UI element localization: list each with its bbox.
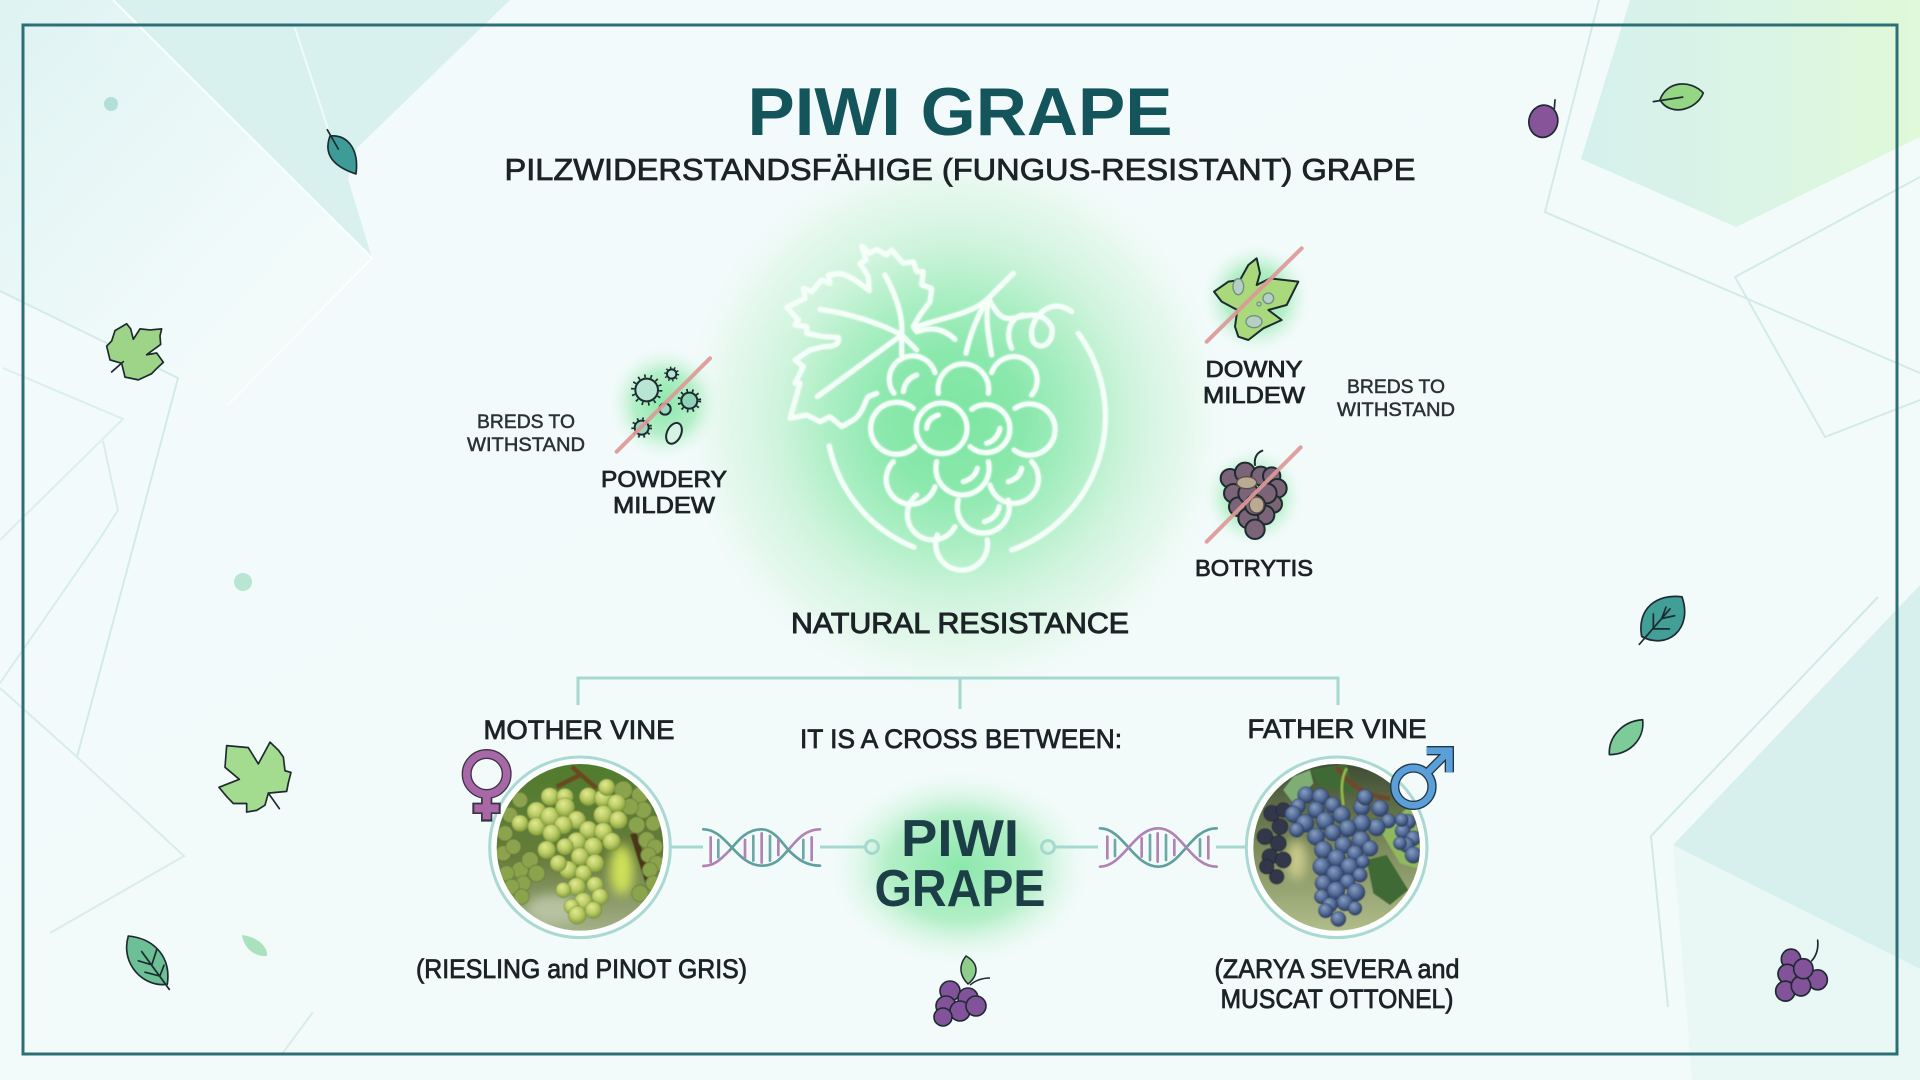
label: breds to withstand right: WITHSTAND xyxy=(1337,399,1455,421)
label: breds to withstand left: WITHSTAND xyxy=(467,434,585,456)
label: downy mildew: MILDEW xyxy=(1203,382,1305,408)
icon: female symbol xyxy=(467,754,507,822)
icon: plum top right xyxy=(1525,100,1562,141)
icon: powdery mildew xyxy=(608,347,722,460)
label: zarya severa and muscat ottonel: (ZARYA SEVERA and xyxy=(1214,954,1460,984)
icon: teal leaf right xyxy=(1639,596,1685,644)
connector bracket xyxy=(578,678,1338,709)
photo: red grape cluster xyxy=(1246,757,1427,938)
connector: right xyxy=(1042,840,1247,854)
icon: green leaf right xyxy=(1609,720,1643,755)
label: father vine: FATHER VINE xyxy=(1248,714,1426,744)
label: botrytis: BOTRYTIS xyxy=(1195,555,1313,581)
connector: left xyxy=(671,840,878,854)
photo: white grape cluster xyxy=(490,757,670,938)
icon: teal leaf top left xyxy=(327,130,357,174)
label: piwi grape xyxy=(874,810,1046,918)
label: zarya severa and muscat ottonel: MUSCAT OTTONEL) xyxy=(1220,984,1454,1014)
label: downy mildew: DOWNY xyxy=(1206,356,1302,382)
icon: dot top left xyxy=(104,97,118,111)
label: riesling and pinot gris: (RIESLING and PINOT GRIS) xyxy=(416,954,747,984)
subtitle: PILZWIDERSTANDSFÄHIGE (FUNGUS-RESISTANT) GRAPE xyxy=(504,152,1416,187)
label: mother vine: MOTHER VINE xyxy=(484,715,674,745)
icon: veined leaf bottom left xyxy=(127,936,169,989)
icon: neon grape cluster xyxy=(787,246,1105,570)
label: breds to withstand left xyxy=(467,411,585,456)
icon: small purple grapes with leaf xyxy=(934,956,990,1026)
label: breds to withstand right xyxy=(1337,376,1455,421)
central glow xyxy=(680,145,1230,695)
label: powdery mildew: POWDERY xyxy=(601,466,727,492)
label: powdery mildew xyxy=(601,466,727,518)
icon: downy mildew xyxy=(1201,243,1311,353)
label: natural resistance: NATURAL RESISTANCE xyxy=(791,608,1129,640)
icon: green leaf top right xyxy=(1653,84,1703,110)
icon: dna helix left xyxy=(703,829,820,866)
label: piwi grape: GRAPE xyxy=(874,860,1046,918)
icon: purple grapes bottom right xyxy=(1776,940,1827,1001)
icon: botrytis xyxy=(1203,447,1303,547)
label: powdery mildew: MILDEW xyxy=(613,492,715,518)
icon: dna helix right xyxy=(1100,828,1217,867)
label: breds to withstand left: BREDS TO xyxy=(477,411,575,433)
icon: maple leaf upper left xyxy=(107,324,163,380)
icon: male symbol xyxy=(1395,751,1449,805)
label: downy mildew xyxy=(1203,356,1305,408)
central glow: piwi grape xyxy=(828,770,1092,966)
label: zarya severa and muscat ottonel xyxy=(1214,954,1460,1014)
title: PIWI GRAPE xyxy=(748,74,1172,150)
icon: dot mid left xyxy=(234,573,252,591)
icon: maple leaf lower left xyxy=(219,742,291,812)
icon: soft leaf bottom left xyxy=(242,935,267,956)
label: piwi grape: PIWI xyxy=(901,810,1019,868)
label: it is a cross between: IT IS A CROSS BETWEEN: xyxy=(800,724,1122,754)
label: breds to withstand right: BREDS TO xyxy=(1347,376,1445,398)
